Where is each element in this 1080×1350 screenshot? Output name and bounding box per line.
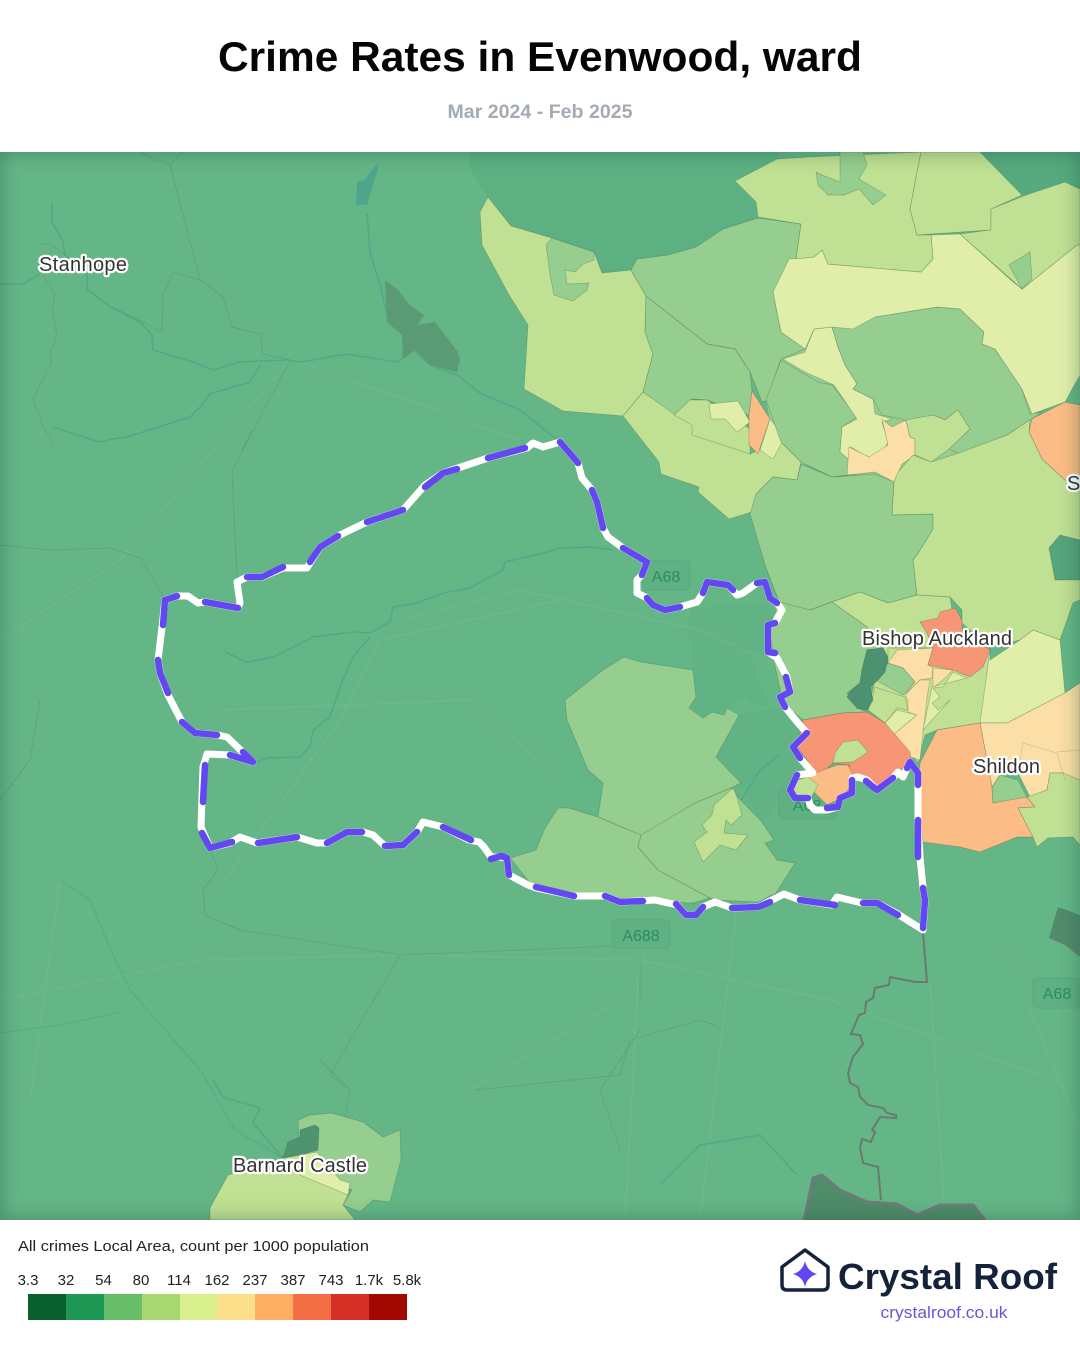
legend [18,1238,422,1320]
road labels: A68 [793,798,821,815]
legend scale values: 743 [318,1272,344,1289]
website link: crystalroof.co.uk [880,1304,1008,1322]
place label: Shildon: Shildon [973,756,1040,778]
icon: house with star [782,1250,828,1290]
map panel [0,152,1080,1226]
dark area at the bottom edge [803,1175,990,1226]
choropleth wards [210,152,1080,1220]
bottom-right district border [848,933,927,1200]
title: Crime Rates in Evenwood, ward [218,33,862,80]
legend scale values: 32 [58,1272,74,1289]
legend scale values: 3.3 [18,1272,38,1289]
place label: clipped S: S [1067,473,1080,495]
map edge shading [0,152,1080,1220]
legend scale values: 80 [133,1272,149,1289]
road labels: A68 [652,569,680,586]
place label: Stanhope: Stanhope [39,254,127,276]
logo: Crystal Roof [782,1250,1058,1322]
legend scale values: 54 [95,1272,112,1289]
ward boundaries [0,152,715,1150]
rivers [0,164,797,1185]
legend scale values: 114 [167,1272,191,1289]
subtitle: date range: Mar 2024 - Feb 2025 [448,102,633,123]
legend scale values: 162 [204,1272,230,1289]
place label: Bishop Auckland: Bishop Auckland [862,628,1012,650]
road labels: A688 [622,928,660,945]
dark woodland area [385,280,460,372]
legend scale values: 5.8k [393,1272,422,1289]
place label: Barnard Castle: Barnard Castle [233,1155,367,1177]
roads [0,360,1080,1220]
dark area at the right edge [1049,907,1080,957]
road labels [612,561,1080,1008]
legend scale values: 1.7k [355,1272,384,1289]
brand name: Crystal Roof [838,1256,1058,1297]
ward outline: Evenwood boundary [158,442,925,930]
road labels: A68 [1043,986,1071,1003]
legend colour bar [28,1294,407,1320]
legend scale values: 387 [280,1272,306,1289]
legend title: All crimes Local Area, count per 1000 population [18,1238,369,1255]
legend scale values [18,1272,422,1289]
legend scale values: 237 [242,1272,268,1289]
